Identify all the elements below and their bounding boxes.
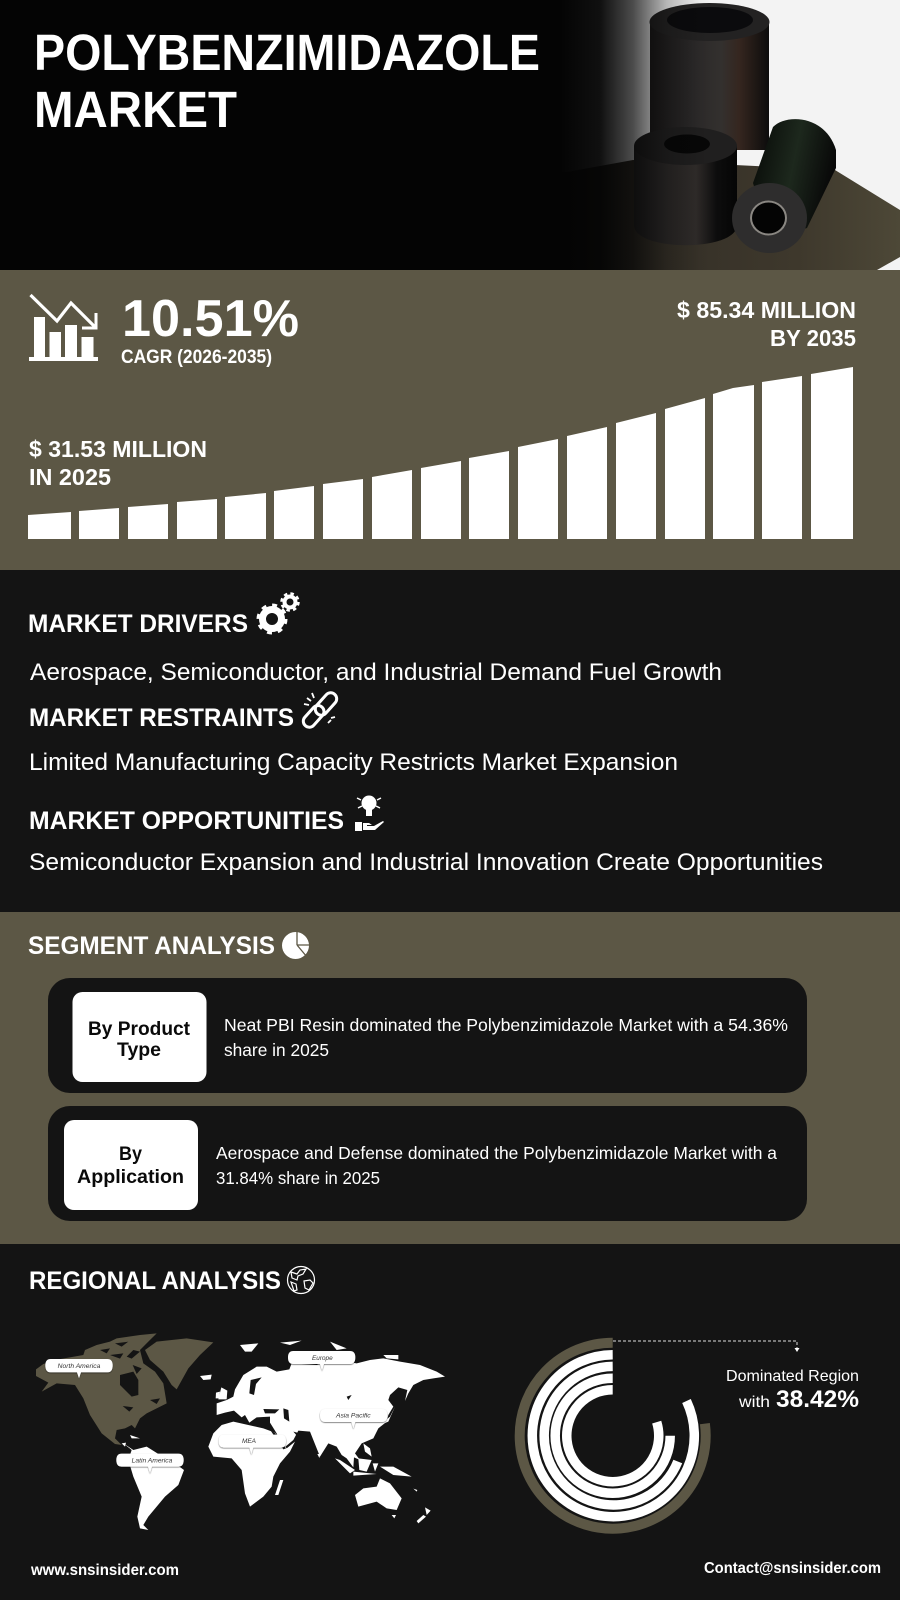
text: product type finding: Neat PBI Resin dominated the Polybenzimidazole Market with a 54.36% [224,1015,788,1035]
bar chart: growth [28,367,853,539]
icon: broken chain [301,690,339,730]
icon: gears [258,594,298,633]
text: application finding: 31.84% share in 2025 [216,1168,380,1188]
CAGR label: CAGR (2026-2035) [121,347,272,368]
dominated region callout: 38.42% [776,1386,859,1413]
card: by application [48,1106,807,1221]
callout: North America [45,1359,113,1378]
product photo: PBI cylinders [560,0,900,270]
heading: market drivers: MARKET DRIVERS [28,610,248,638]
callout: Latin America: Latin America [132,1458,173,1465]
label box: by application: By [119,1143,142,1165]
text: product type finding [224,1015,788,1060]
panel: header [0,0,900,270]
label box: by product type: By Product [88,1018,190,1040]
text: application finding [216,1143,777,1188]
callout: Latin America [116,1454,184,1473]
footer: contact: Contact@snsinsider.com [704,1560,881,1577]
callout: MEA [219,1435,286,1454]
seas [249,1377,352,1449]
icon: lightbulb and hand [355,796,384,831]
callout: Asia Pacific: Asia Pacific [335,1413,371,1420]
region: North America [36,1333,213,1445]
heading: market opportunities: MARKET OPPORTUNITIES [29,807,344,835]
heading: market restraints: MARKET RESTRAINTS [29,704,294,732]
title [34,24,540,138]
text: restraints: Limited Manufacturing Capacity Restricts Market Expansion [29,749,678,776]
label box: by product type: Type [117,1039,161,1061]
heading: segment analysis: SEGMENT ANALYSIS [28,932,275,960]
callout: Asia Pacific [320,1409,387,1429]
text: product type finding: share in 2025 [224,1040,329,1060]
text: opportunities: Semiconductor Expansion and Industrial Innovation Create Opportunities [29,849,823,876]
CAGR value: 10.51% [122,290,299,348]
panel: market size [0,270,900,570]
footer: website: www.snsinsider.com [30,1562,179,1579]
callout: MEA: MEA [242,1438,257,1445]
dominated region callout: with [738,1394,770,1411]
icon: globe [288,1266,314,1294]
callout: North America: North America [58,1363,101,1370]
icon: pie chart [282,930,311,959]
icon: chart with declining arrow [29,295,98,361]
2025 value [29,436,207,490]
title: POLYBENZIMIDAZOLE [34,24,540,81]
radial chart [520,1343,706,1529]
2035 value [677,297,856,351]
text: drivers: Aerospace, Semiconductor, and Industrial Demand Fuel Growth [30,659,722,686]
2035 value: $ 85.34 MILLION [677,297,856,323]
panel: drivers, restraints, opportunities [0,570,900,912]
arrow: dotted leader [613,1341,800,1352]
North America inland waters [100,1342,160,1412]
region: rest of world [122,1341,445,1530]
heading: regional analysis: REGIONAL ANALYSIS [29,1267,281,1295]
dominated region callout [726,1368,859,1413]
2035 value: BY 2035 [770,325,856,351]
callout: Europe: Europe [312,1355,333,1362]
label box: by product type [72,992,206,1082]
panel: regional analysis [0,1244,900,1600]
label box: by application: Application [77,1166,184,1188]
label box: by application [64,1120,198,1210]
dominated region callout: Dominated Region [726,1368,859,1385]
card: by product type [48,978,807,1093]
world map [36,1333,445,1530]
title: MARKET [34,81,237,138]
2025 value: IN 2025 [29,464,111,490]
text: application finding: Aerospace and Defense dominated the Polybenzimidazole Market with a [216,1143,777,1163]
2025 value: $ 31.53 MILLION [29,436,207,462]
callout: Europe [288,1351,355,1371]
panel: segment analysis [0,912,900,1244]
